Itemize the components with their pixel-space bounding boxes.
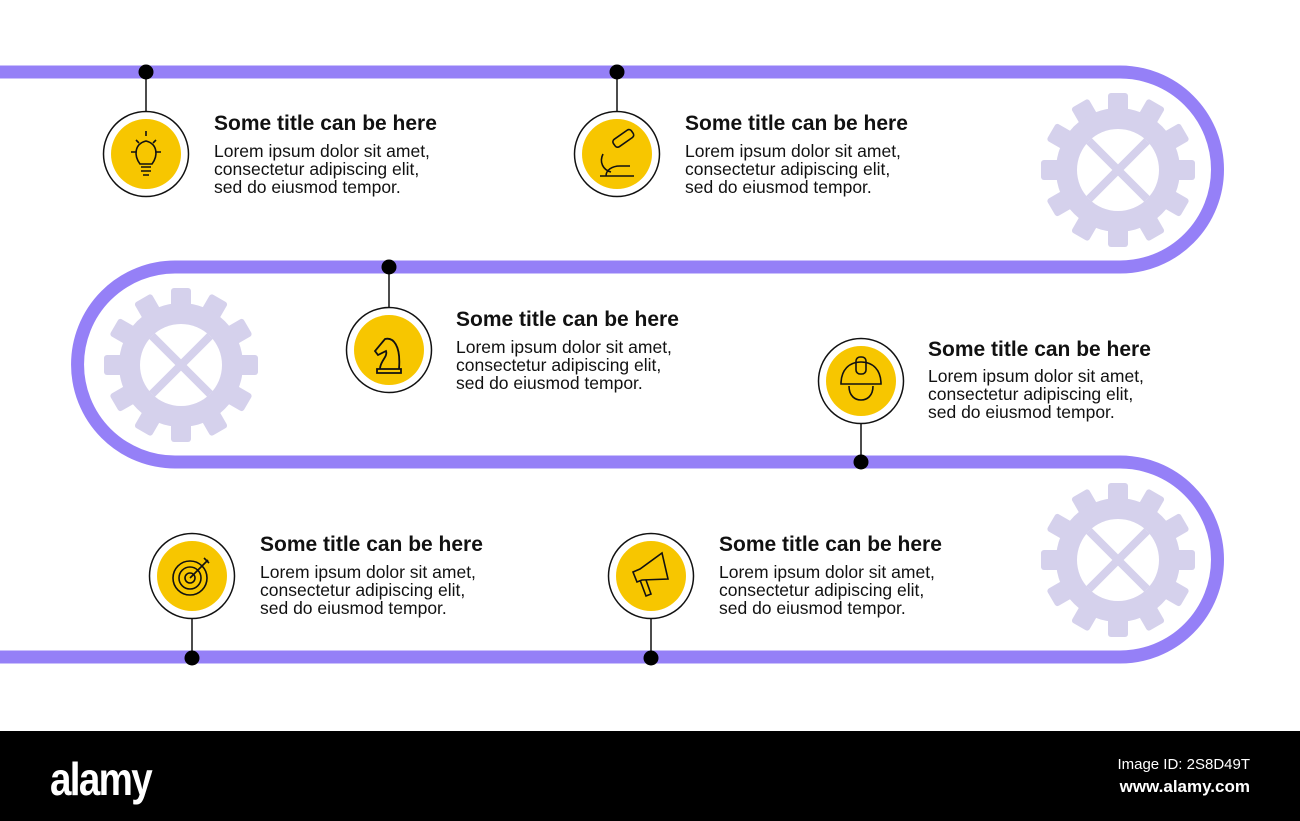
step 4: helmet: consectetur adipiscing elit, — [928, 384, 1133, 404]
gear: top right — [1041, 93, 1195, 247]
step 4: helmet: sed do eiusmod tempor. — [928, 402, 1115, 422]
url: www.alamy.com — [1119, 777, 1250, 796]
icon: target — [173, 558, 209, 595]
step 6: megaphone — [608, 533, 942, 666]
gear: middle left — [104, 288, 258, 442]
icon: light bulb — [131, 131, 161, 175]
icon: helmet with gear — [841, 357, 881, 400]
step 5: target: Lorem ipsum dolor sit amet, — [260, 562, 476, 582]
logo: alamy — [50, 753, 153, 805]
step 1: idea: Lorem ipsum dolor sit amet, — [214, 141, 430, 161]
step 3: chess knight: Some title can be here — [456, 308, 679, 331]
step 1: idea: consectetur adipiscing elit, — [214, 159, 419, 179]
icon: knight — [375, 339, 401, 373]
step 6: megaphone: Some title can be here — [719, 533, 942, 556]
step 3: chess knight: sed do eiusmod tempor. — [456, 373, 643, 393]
step 3: chess knight: consectetur adipiscing elit, — [456, 355, 661, 375]
step 4: helmet: Some title can be here — [928, 338, 1151, 361]
step 1: idea: sed do eiusmod tempor. — [214, 177, 401, 197]
icon: microscope — [600, 128, 635, 176]
step 2: microscope: Some title can be here — [685, 112, 908, 135]
icon: megaphone — [633, 553, 668, 596]
step 6: megaphone: consectetur adipiscing elit, — [719, 580, 924, 600]
step 3: chess knight: Lorem ipsum dolor sit amet, — [456, 337, 672, 357]
step 4: helmet: Lorem ipsum dolor sit amet, — [928, 366, 1144, 386]
step 2: microscope: consectetur adipiscing elit, — [685, 159, 890, 179]
image id: Image ID: 2S8D49T — [1117, 756, 1250, 773]
step 6: megaphone: sed do eiusmod tempor. — [719, 598, 906, 618]
step 5: target: Some title can be here — [260, 533, 483, 556]
step 5: target: sed do eiusmod tempor. — [260, 598, 447, 618]
step 2: microscope — [574, 64, 908, 197]
step 1: idea — [104, 64, 437, 197]
step 2: microscope: Lorem ipsum dolor sit amet, — [685, 141, 901, 161]
step 2: microscope: sed do eiusmod tempor. — [685, 177, 872, 197]
step 3: chess knight — [346, 260, 679, 393]
step 6: megaphone: Lorem ipsum dolor sit amet, — [719, 562, 935, 582]
step 5: target: consectetur adipiscing elit, — [260, 580, 465, 600]
footer bar — [0, 731, 1300, 821]
step 5: target — [150, 533, 483, 666]
step 1: idea: Some title can be here — [214, 112, 437, 135]
winding track — [0, 72, 1218, 657]
step 4: helmet — [818, 338, 1151, 470]
gear: bottom right — [1041, 483, 1195, 637]
